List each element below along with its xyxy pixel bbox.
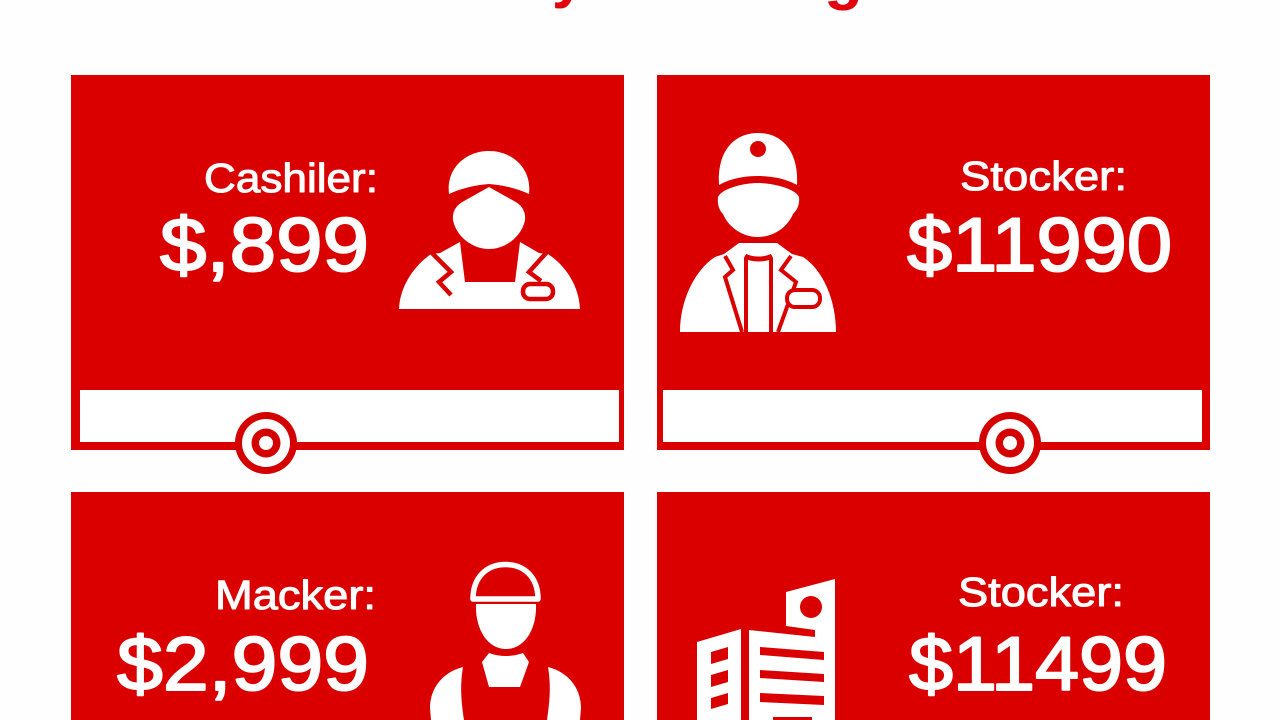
wage: $2,999: $2,999 (117, 622, 369, 707)
icon: office building (697, 579, 835, 720)
wage: $,899: $,899 (160, 203, 369, 288)
title: cropped heading descenders (552, 0, 863, 11)
job label: Stocker: Stocker: (960, 153, 1127, 199)
icon: target marker (979, 412, 1041, 474)
job label: Macker: Macker: (215, 572, 376, 618)
job label: Cashiler: Cashiler: (204, 155, 378, 201)
panel: stocker building (657, 492, 1210, 720)
panel: stocker (657, 75, 1210, 474)
label bar (80, 390, 619, 442)
wage: $11990: $11990 (907, 203, 1172, 288)
label bar (663, 390, 1202, 442)
panel: macker (71, 492, 624, 720)
wage: $11499: $11499 (909, 622, 1167, 707)
icon: cashier person (399, 151, 580, 309)
icon: stocker person (680, 133, 836, 332)
panel: cashier (71, 75, 624, 474)
job label: Stocker: Stocker: (958, 569, 1124, 615)
icon: worker with hard hat (430, 564, 581, 720)
icon: target marker (235, 412, 297, 474)
